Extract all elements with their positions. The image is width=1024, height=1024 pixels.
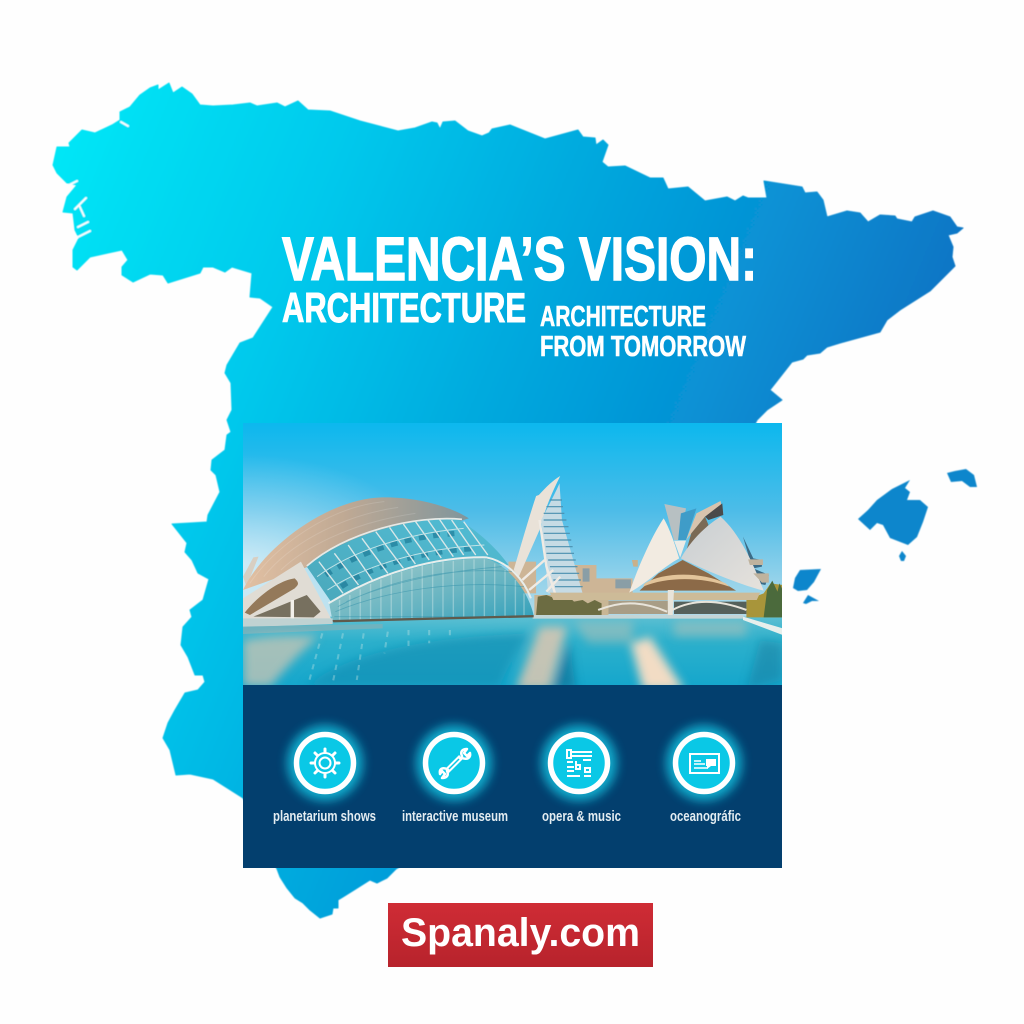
hemispheric roof — [243, 557, 259, 587]
heading: main title: VALENCIA’S VISION: — [282, 225, 757, 293]
info panel — [243, 685, 782, 868]
icon: oceanografic card — [666, 725, 742, 801]
icon: wrench — [416, 725, 492, 801]
subtitle: architecture from tomorrow: FROM TOMORROW — [540, 331, 746, 363]
left arch — [243, 562, 333, 622]
reflections in water — [243, 622, 783, 690]
subtitle: architecture from tomorrow: ARCHITECTURE — [540, 301, 706, 333]
icon: planetarium gear — [287, 725, 363, 801]
opera house — [743, 537, 769, 585]
title block — [282, 225, 757, 363]
logo: Spanaly.com — [388, 903, 653, 967]
islands: Balearic — [793, 469, 977, 604]
icon labels: oceanográfic — [670, 809, 741, 825]
distant buildings — [508, 562, 633, 593]
icon labels: planetarium shows — [273, 809, 376, 825]
ground under bridge — [534, 595, 608, 616]
map of Spain — [53, 83, 963, 918]
lower glass — [329, 558, 534, 622]
icon: opera schedule — [541, 725, 617, 801]
bridge — [550, 593, 760, 600]
trees — [536, 595, 602, 615]
heading: architecture: ARCHITECTURE — [282, 284, 526, 331]
photo: City of Arts and Sciences — [243, 420, 783, 690]
icon labels — [273, 809, 741, 825]
platform — [243, 618, 333, 627]
upper glass — [307, 519, 508, 602]
logo: Spanaly.com: Spanaly.com — [401, 911, 640, 955]
subtitle: architecture from tomorrow — [540, 301, 746, 363]
icon labels: interactive museum — [402, 809, 508, 825]
icon labels: opera & music — [542, 809, 621, 825]
tower — [514, 476, 560, 577]
